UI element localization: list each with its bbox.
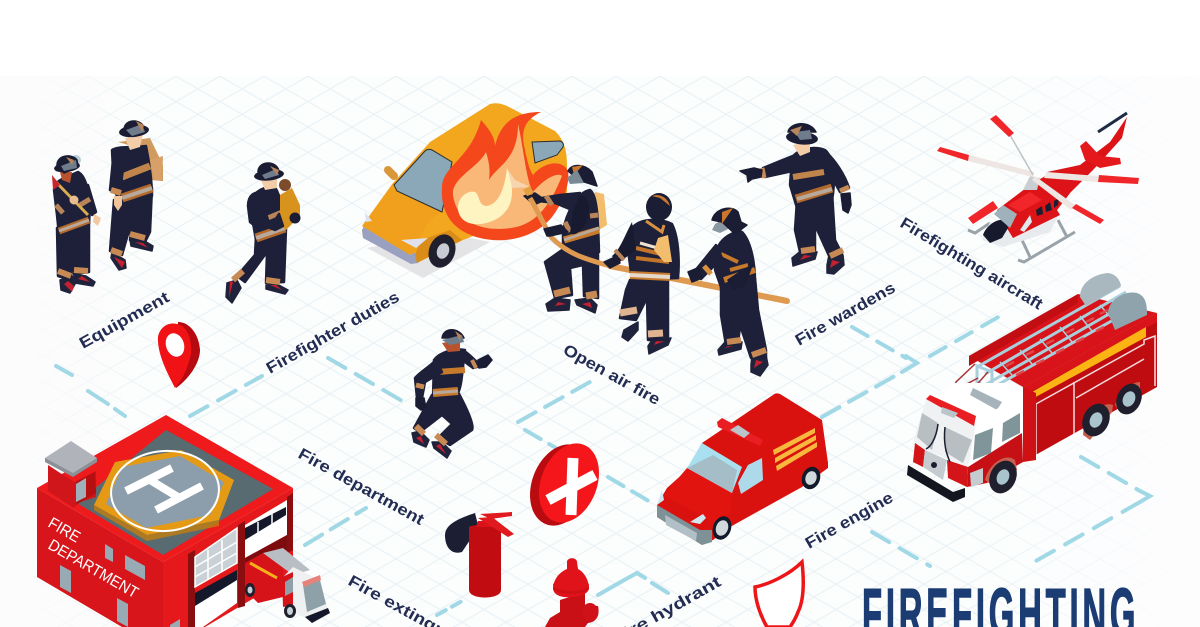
car shadow	[367, 232, 490, 278]
firefighter centre on hose	[604, 193, 679, 354]
left wall	[37, 488, 163, 627]
wheels	[709, 514, 735, 542]
access stair box	[48, 465, 96, 508]
front bumper	[657, 505, 712, 545]
roof rollers	[1080, 273, 1121, 306]
windshield	[394, 149, 452, 212]
skids	[968, 220, 1075, 262]
right wall	[163, 488, 293, 627]
fire hose	[530, 198, 785, 300]
hose nozzle spray	[508, 170, 530, 188]
truck body top	[969, 294, 1157, 387]
icon: map pin	[158, 322, 200, 388]
cockpit nose	[983, 220, 1008, 243]
small fire truck in garage	[245, 548, 330, 623]
fire department building: DEPARTMENT	[45, 537, 141, 602]
tail boom	[1040, 117, 1127, 210]
H mark	[126, 468, 202, 510]
roof lights	[926, 395, 976, 426]
dashed connector lines	[56, 316, 1150, 615]
label: Firefighter duties: Firefighter duties	[264, 289, 403, 377]
front wheel	[985, 458, 1017, 490]
icon: fire extinguisher	[445, 512, 514, 598]
firefighter with hose coil	[110, 121, 163, 270]
truck side	[1023, 313, 1157, 462]
right wall garage: door frames	[188, 493, 293, 627]
rear wheels	[1083, 404, 1113, 440]
roof rim	[37, 415, 293, 562]
fuselage lower white	[982, 208, 1060, 247]
roof deck	[77, 430, 273, 555]
firefighter carrying child	[226, 163, 300, 303]
cab roof	[927, 383, 1022, 424]
firefighter running	[412, 330, 492, 458]
ladder	[977, 286, 1140, 388]
yellow car on fire	[362, 103, 568, 278]
firefighter rear on hose	[688, 208, 768, 376]
fuselage red	[997, 175, 1070, 238]
label: Firefighting aircraft: Firefighting aircraft	[897, 215, 1046, 314]
cab side	[967, 393, 1023, 487]
red van	[657, 393, 828, 545]
firefighter pointing warden	[740, 124, 851, 274]
icon: first aid cross disc	[519, 435, 610, 535]
icon: shield	[755, 562, 803, 627]
wheel	[424, 231, 460, 271]
roof light	[717, 418, 763, 446]
van body	[657, 393, 828, 545]
left wall windows	[60, 544, 180, 627]
flame middle	[453, 124, 562, 229]
label: Open air fire: Open air fire	[560, 342, 663, 409]
fire department building	[37, 415, 330, 627]
helipad	[94, 450, 234, 535]
mirror	[388, 170, 394, 176]
flame outer	[442, 112, 568, 240]
side window	[532, 141, 563, 163]
car body	[362, 103, 567, 263]
flame inner	[458, 168, 512, 224]
helicopter	[937, 113, 1139, 262]
large fire engine	[907, 273, 1157, 502]
label: Equipment: Equipment	[77, 289, 173, 352]
building sign text: FIRE	[45, 515, 83, 546]
rotor mast	[1023, 176, 1040, 190]
headlight	[690, 514, 706, 524]
label: Fire department: Fire department	[295, 446, 427, 529]
ladder hoops	[955, 364, 995, 394]
firefighter with axe	[52, 155, 101, 293]
label: Fire engine: Fire engine	[803, 489, 896, 552]
label: Fire wardens: Fire wardens	[793, 279, 899, 349]
orange stripes panel	[773, 428, 817, 471]
side window	[738, 458, 763, 494]
icon: fire hydrant	[545, 558, 599, 627]
bumper	[907, 465, 965, 502]
windshield	[687, 443, 742, 493]
bonnet	[664, 468, 732, 522]
firefighter spraying with hose	[508, 165, 787, 313]
cab front	[913, 398, 976, 467]
rotor blades	[968, 155, 1034, 177]
headlights	[365, 212, 428, 248]
